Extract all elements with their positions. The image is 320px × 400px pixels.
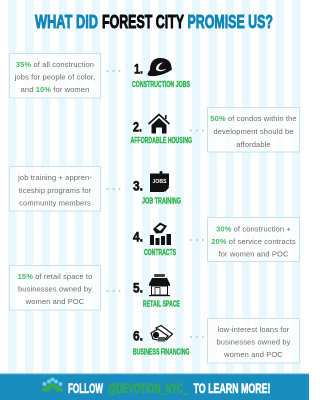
- step 3: job training: JOB TRAINING: [142, 196, 181, 206]
- panel: retail space promise: women and POC: [25, 297, 85, 306]
- footer banner: FOLLOW: [68, 380, 103, 396]
- panel: contracts promise: for women and POC: [218, 250, 289, 258]
- step 2: affordable housing: 2.: [133, 118, 142, 134]
- panel: job training promise: job training + appren-: [17, 173, 92, 182]
- icon: logo: [42, 378, 63, 392]
- panel: business financing promise: low-interest loans for: [218, 325, 290, 334]
- panel: business financing promise: [208, 318, 300, 363]
- panel: affordable housing promise: [208, 108, 300, 152]
- step 1: construction jobs: [132, 58, 190, 89]
- step 4: contracts: [133, 222, 176, 257]
- panel: contracts promise: 30% of construction +: [216, 224, 291, 234]
- panel: retail space promise: 15% of retail space to: [18, 272, 92, 281]
- panel: contracts promise: 20% of service contracts: [211, 237, 296, 246]
- step 5: retail space: 5.: [133, 280, 143, 296]
- step 3: job training: 3.: [133, 178, 143, 194]
- panel: business financing promise: women and POC: [223, 350, 283, 359]
- icon: handshake and bars: [150, 222, 171, 245]
- step 6: business financing: BUSINESS FINANCING: [133, 346, 190, 356]
- dots: row 2 connector: [190, 130, 204, 132]
- title: WHAT DID: [35, 11, 98, 32]
- step 3: job training: [133, 171, 181, 206]
- panel: construction jobs promise: and 10% for women: [21, 85, 89, 94]
- step 2: affordable housing: [130, 114, 192, 145]
- step 5: retail space: [133, 274, 180, 308]
- title: FOREST CITY: [102, 11, 184, 32]
- panel: affordable housing promise: affordable: [236, 140, 271, 149]
- panel: business financing promise: businesses owned by: [216, 338, 291, 346]
- step 4: contracts: 4.: [133, 228, 143, 244]
- step 1: construction jobs: CONSTRUCTION JOBS: [132, 79, 190, 89]
- dots: row 5 connector: [106, 290, 120, 292]
- title: [35, 11, 273, 32]
- panel: contracts promise: [208, 218, 300, 262]
- panel: job training promise: [10, 166, 100, 211]
- panel: affordable housing promise: 50% of condos within the: [210, 114, 297, 123]
- panel: construction jobs promise: jobs for people of color,: [14, 72, 95, 82]
- dots: row 1 connector: [106, 70, 120, 72]
- step 5: retail space: RETAIL SPACE: [143, 298, 180, 308]
- panel: affordable housing promise: development should be: [213, 127, 294, 136]
- footer banner: [0, 374, 309, 400]
- panel: job training promise: ticeship programs for: [19, 186, 92, 195]
- icon: money bills: [151, 326, 172, 342]
- step 6: business financing: 6.: [133, 328, 143, 344]
- step 6: business financing: [133, 326, 190, 356]
- step 1: construction jobs: 1.: [134, 60, 143, 76]
- panel: job training promise: community members: [19, 198, 91, 208]
- panel: retail space promise: [10, 266, 100, 310]
- icon: storefront: [149, 274, 170, 296]
- footer banner: @DEVOTION_NYC_: [108, 380, 188, 396]
- dots: row 6 connector: [190, 336, 204, 338]
- dots: row 3 connector: [106, 188, 120, 190]
- icon: hard hat: [148, 58, 172, 76]
- panel: construction jobs promise: [10, 54, 100, 98]
- step 2: affordable housing: AFFORDABLE HOUSING: [130, 135, 192, 145]
- step 4: contracts: CONTRACTS: [144, 247, 176, 257]
- dots: row 4 connector: [190, 239, 204, 241]
- icon: house: [148, 114, 170, 134]
- panel: retail space promise: businesses owned by: [18, 284, 92, 294]
- panel: construction jobs promise: 35% of all construction: [16, 60, 94, 69]
- icon: jobs note: JOBS: [152, 179, 167, 185]
